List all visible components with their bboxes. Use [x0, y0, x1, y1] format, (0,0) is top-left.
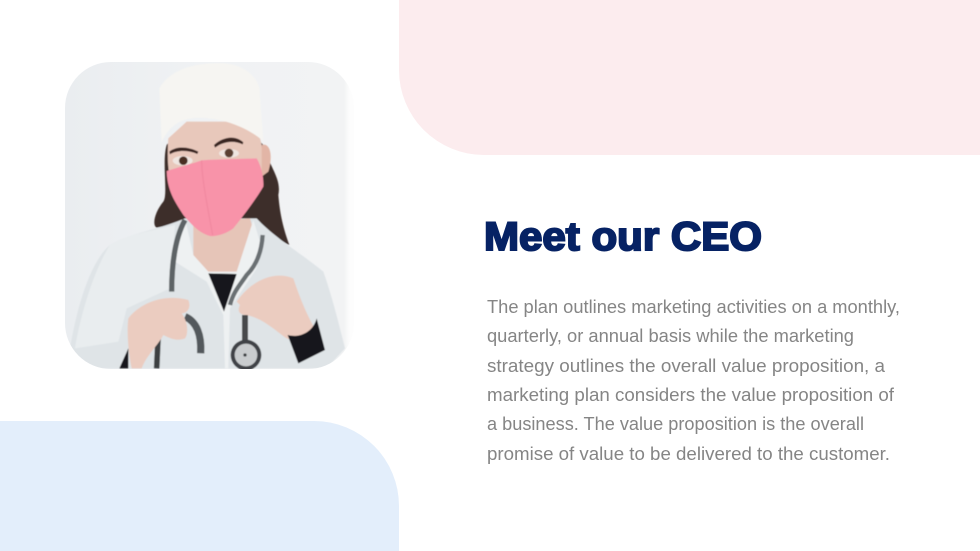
- stethoscope chest piece: [231, 340, 261, 370]
- ear: [262, 145, 271, 177]
- body text: promise of value to be delivered to the customer.: [487, 444, 890, 464]
- body text: [487, 297, 900, 464]
- body text: strategy outlines the overall value proposition, a: [487, 356, 886, 376]
- hair: [154, 142, 290, 246]
- body text: marketing plan considers the value proposition of: [487, 385, 895, 405]
- eyes: [173, 156, 193, 165]
- photo: doctor wearing pink mask: [65, 62, 354, 370]
- black sleeves: [288, 318, 325, 363]
- body text: The plan outlines marketing activities on a monthly,: [487, 297, 900, 317]
- pink mask: [167, 158, 263, 236]
- hands: [128, 298, 189, 368]
- stethoscope lower tube: [185, 317, 201, 353]
- cap: [159, 63, 263, 142]
- black undershirt: [208, 273, 237, 312]
- face: [166, 121, 262, 171]
- coat: [70, 218, 345, 368]
- brows: [169, 148, 198, 154]
- pink corner panel: [399, 0, 980, 155]
- blue corner panel: [0, 421, 399, 551]
- neck and chest: [193, 218, 252, 272]
- stethoscope tube: [172, 220, 185, 292]
- title: Meet our CEO: [484, 215, 762, 259]
- body text: quarterly, or annual basis while the marketing: [487, 326, 854, 346]
- coat collar: [175, 218, 260, 368]
- body text: a business. The value proposition is the overall: [487, 414, 864, 434]
